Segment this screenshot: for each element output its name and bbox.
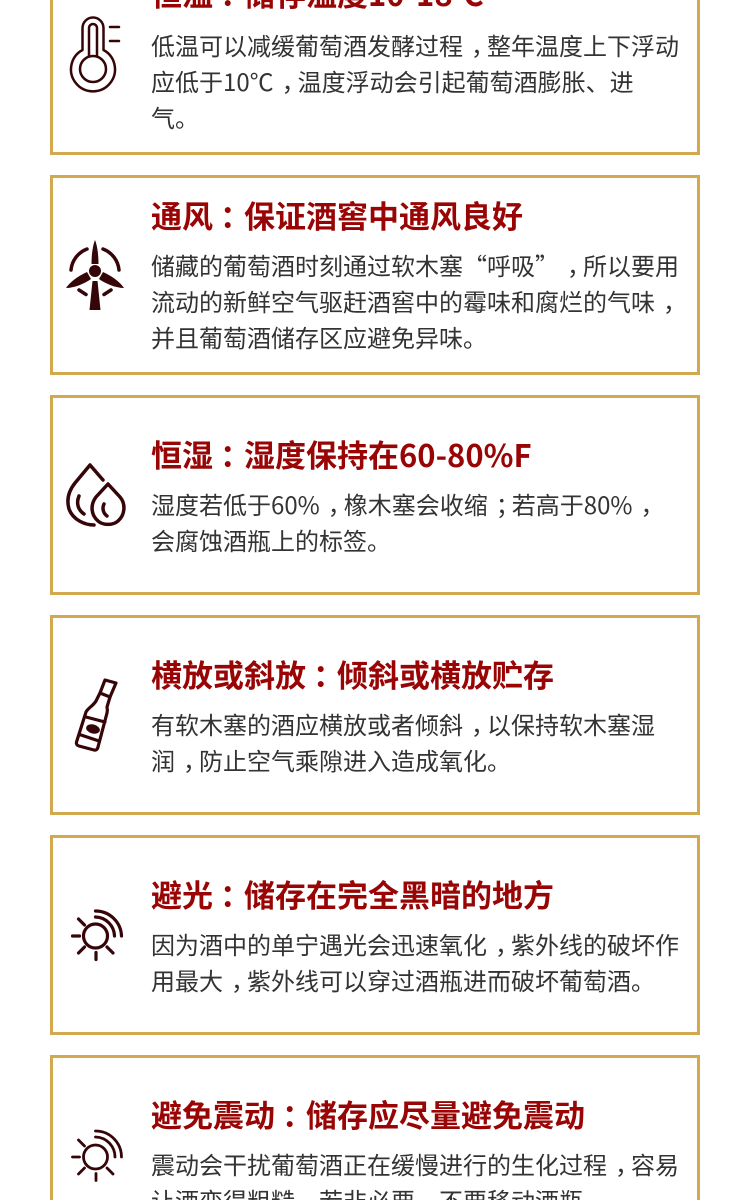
text: constant temperature: 低温可以减缓葡萄酒发酵过程 ，整年温度上下浮动 <box>151 27 679 62</box>
text: horizontal storage <box>151 706 655 777</box>
text: ventilation <box>151 247 687 354</box>
text: constant temperature <box>151 27 679 134</box>
icon: vibration <box>71 1130 123 1182</box>
panel: horizontal storage <box>50 615 700 815</box>
panel: avoid light <box>50 835 700 1035</box>
icon: thermometer <box>70 16 120 93</box>
text: humidity: 会腐蚀酒瓶上的标签。 <box>151 522 391 557</box>
text: constant temperature: 应低于10℃ ，温度浮动会引起葡萄酒膨胀、进 <box>151 63 634 98</box>
text: humidity <box>151 486 664 557</box>
panel: ventilation <box>50 175 700 375</box>
text: ventilation: ” <box>535 247 559 282</box>
icon: water drops <box>66 463 126 527</box>
text: humidity: 湿度若低于60% ，橡木塞会收缩 ；若高于80% ， <box>151 486 664 521</box>
heading: avoid light: 避光：储存在完全黑暗的地方 <box>151 871 554 916</box>
heading: horizontal storage: 横放或斜放：倾斜或横放贮存 <box>151 651 554 696</box>
panel: humidity <box>50 395 700 595</box>
icon: wine bottle <box>74 678 118 752</box>
icon: sun <box>70 909 124 962</box>
panel: avoid vibration <box>50 1055 700 1200</box>
text: avoid light <box>151 926 679 997</box>
text: horizontal storage: 有软木塞的酒应横放或者倾斜 ，以保持软木塞湿 <box>151 706 655 741</box>
text: constant temperature: 气。 <box>151 99 199 134</box>
text: horizontal storage: 润 ，防止空气乘隙进入造成氧化。 <box>151 742 511 777</box>
text: avoid vibration: 震动会干扰葡萄酒正在缓慢进行的生化过程 ，容易 <box>151 1146 679 1181</box>
text: ventilation: 并且葡萄酒储存区应避免异味。 <box>151 319 487 354</box>
text: avoid vibration <box>151 1146 679 1200</box>
text: ventilation: 储藏的葡萄酒时刻通过软木塞 呼吸 ，所以要用 <box>151 247 679 282</box>
text: avoid light: 因为酒中的单宁遇光会迅速氧化 ，紫外线的破坏作 <box>151 926 679 961</box>
text: avoid light: 用最大 ，紫外线可以穿过酒瓶进而破坏葡萄酒。 <box>151 962 655 997</box>
heading: ventilation: 通风：保证酒窖中通风良好 <box>151 192 523 237</box>
text: ventilation: “ <box>463 247 487 282</box>
heading: humidity: 恒湿：湿度保持在60-80%F <box>151 431 532 476</box>
icon: wind turbine <box>66 240 124 310</box>
panel: constant temperature <box>50 0 700 155</box>
text: ventilation: 流动的新鲜空气驱赶酒窖中的霉味和腐烂的气味 ， <box>151 283 687 318</box>
heading: avoid vibration: 避免震动：储存应尽量避免震动 <box>151 1091 585 1136</box>
